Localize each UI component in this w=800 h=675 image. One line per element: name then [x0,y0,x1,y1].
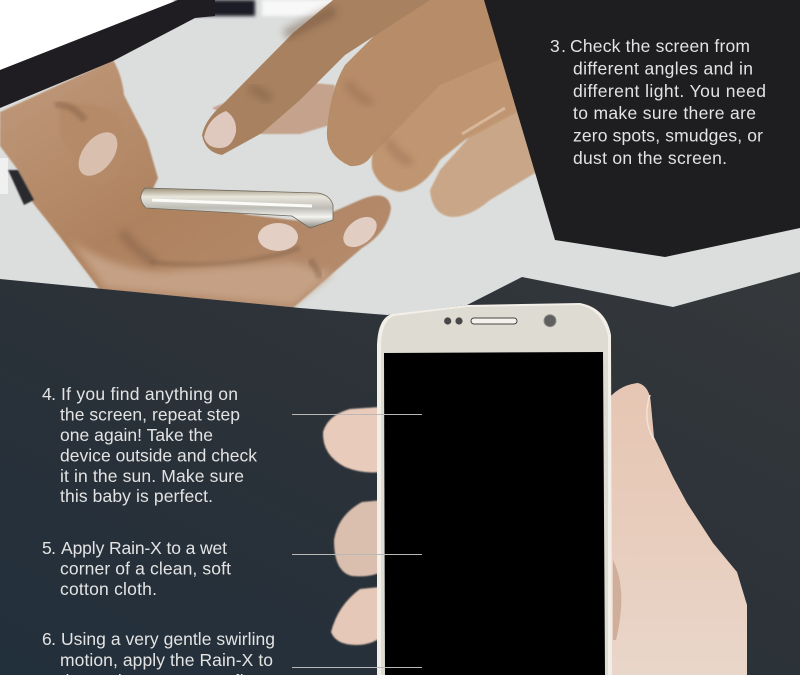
step 5 text: cotton cloth. [60,579,157,599]
step 6 text [42,629,275,675]
little finger [430,100,540,217]
ring finger [372,50,530,192]
step 3 text: to make sure there are [573,103,756,123]
step 5 text [42,538,231,599]
photo: left hand holding phone [0,60,391,308]
step 3 text: zero spots, smudges, or [573,126,763,146]
step 6 text: 6. [42,629,56,649]
step 4 text: one again! Take the [60,425,213,445]
leader lines [292,414,422,668]
photo: right hand pointing [202,0,540,217]
finger one [323,407,380,472]
dark panel for step 3 [484,0,800,257]
dark diagonal band top left [0,0,215,108]
fingernail on index finger [258,223,298,251]
hand: thumb and palm on the right [606,383,747,675]
shading between index and middle finger [150,248,300,265]
step 4 text: this baby is perfect. [60,486,213,506]
middle finger [327,0,510,166]
watch strap edge [0,158,34,205]
speaker [471,318,517,324]
thumbnail [71,125,125,183]
thumb behind index finger [212,80,335,134]
step 3 text: dust on the screen. [573,148,727,168]
step 5 text: corner of a clean, soft [60,558,231,578]
step 4 text: the screen, repeat step [60,404,240,424]
front camera [544,315,556,327]
finger two [334,500,385,576]
step 3 text: 3. [550,36,566,56]
step 4 text: If you find anything on [61,384,238,404]
knuckle shading [285,10,335,35]
hand: fingers behind phone [323,407,385,645]
step 3 text: different angles and in [573,58,753,78]
step 6 text: motion, apply the Rain-X to [60,650,273,670]
step 3 text: different light. You need [573,81,766,101]
step 4 text: it in the sun. Make sure [60,466,244,486]
step 3 text [550,36,766,168]
step 5 text: 5. [42,538,56,558]
step 5 text: Apply Rain-X to a wet [61,538,227,558]
screen [384,352,605,675]
finger three [331,587,380,645]
smartphone front [377,303,612,675]
pointing fingernail [204,111,236,148]
lower dark background panel [0,272,800,675]
sensors [444,317,463,325]
step 4 text: device outside and check [60,446,257,466]
phone body [377,303,612,675]
step 4 text [42,384,257,506]
step 4 text: 4. [42,384,56,404]
index finger [202,0,430,155]
step 6 text: Using a very gentle swirling [61,629,275,649]
photo: phone seen edge-on [141,188,333,228]
step 3 text: Check the screen from [570,36,750,56]
fingernail on middle finger [338,211,382,253]
